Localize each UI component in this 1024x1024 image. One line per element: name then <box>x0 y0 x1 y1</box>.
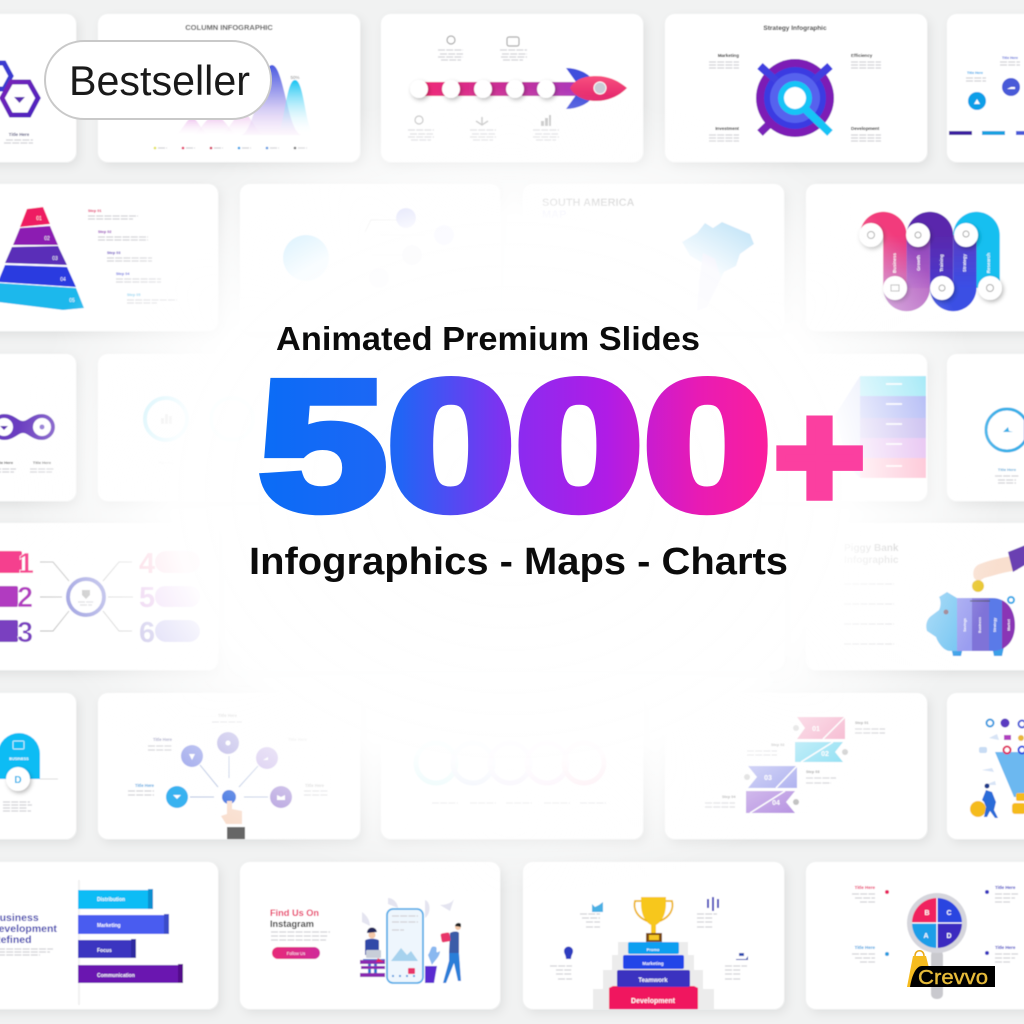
timeline bar <box>425 82 587 96</box>
panel: steps slide, row 1 right <box>947 14 1024 162</box>
map shape <box>682 222 754 284</box>
column bell chart: 50% <box>290 75 300 80</box>
chart legend <box>154 147 307 149</box>
panel: step ribbons slide: 03 <box>764 775 772 782</box>
person seated <box>360 927 385 977</box>
background stairs <box>593 942 714 1009</box>
panel: hexagon slide, row 1 <box>0 14 76 162</box>
panel: puzzle magnifier: Title Here <box>995 945 1016 950</box>
panel: blank center card right, row 4 <box>523 523 784 670</box>
person and coins <box>970 784 1024 818</box>
panel: link slide, row 3 left: Title Here <box>33 460 52 465</box>
labels: Efficiency <box>851 53 873 58</box>
panel: trophy staircase <box>523 862 784 1009</box>
panel: strategy infographic <box>665 14 927 162</box>
panel: puzzle magnifier: Title Here <box>855 885 875 890</box>
follow button: Follow Us <box>287 951 305 956</box>
labels: Development <box>851 126 880 131</box>
panel: business development bars <box>0 862 218 1009</box>
items 1 to 3: 1 <box>18 548 34 580</box>
badge: Bestseller <box>45 41 271 119</box>
panel: rings slide, row 3: Planning <box>158 460 174 465</box>
piggy: Savings <box>963 618 967 632</box>
pyramid captions <box>88 209 177 303</box>
panel: blank center card, row 4 <box>240 523 500 670</box>
follow button <box>272 947 320 959</box>
pyramid captions: Step 05 <box>127 293 141 297</box>
panel: strategy infographic: Strategy Infographic <box>763 25 827 32</box>
phone illustration <box>360 898 461 983</box>
panel: ribbon snake infographic: Training <box>939 254 944 272</box>
piggy: Market <box>1007 618 1011 631</box>
piggy: Business <box>978 617 982 633</box>
subheading: Infographics - Maps - Charts: Infographics - Maps - Charts <box>249 541 788 583</box>
panel: puzzle magnifier <box>806 862 1024 1009</box>
items 4 to 6: 5 <box>139 582 155 614</box>
piggy: Strategy <box>993 618 997 632</box>
panel: numbered hub slide <box>0 523 218 670</box>
pyramid <box>0 207 84 310</box>
person standing <box>440 923 461 983</box>
panel: South America map: MAP <box>542 209 566 221</box>
items 4 to 6: 4 <box>139 548 155 580</box>
pyramid: 04 <box>60 277 66 283</box>
panel: business development bars: Marketing <box>97 923 121 929</box>
panel: ribbon snake infographic: Research <box>986 253 991 273</box>
panel: step ribbons slide: 02 <box>821 751 829 758</box>
panel: puzzle magnifier: Title Here <box>855 945 875 950</box>
panel: arch slide, row 5 left: D <box>14 775 22 786</box>
white center fade <box>12 87 1008 893</box>
pyramid captions: Step 02 <box>98 230 112 234</box>
labels: Marketing <box>718 53 739 58</box>
icons and captions <box>550 897 748 979</box>
steps: Promo <box>647 947 660 952</box>
panel: gauge slide, row 3 right: Title Here <box>998 467 1017 472</box>
panel: step ribbons slide: 01 <box>812 726 820 733</box>
items 4 to 6 <box>103 548 200 649</box>
items 1 to 3 <box>0 548 69 649</box>
panel: radial hand slide: Title Here <box>288 737 308 742</box>
steps: Marketing <box>642 961 664 966</box>
panel: pyramid slide <box>0 184 218 331</box>
items 1 to 3: 3 <box>17 617 33 649</box>
panel: radial hand slide: Title Here <box>153 737 173 742</box>
panel: ribbon snake infographic: Business <box>892 253 897 273</box>
panel: piggy bank infographic <box>858 523 1024 674</box>
panel: column infographic: COLUMN INFOGRAPHIC <box>185 23 273 32</box>
logo: Crevvo: Crevvo <box>918 967 988 989</box>
panel: ribbon snake infographic <box>806 184 1024 331</box>
panel: piggy bank infographic: Infographic <box>844 555 899 566</box>
labels <box>709 53 881 141</box>
logo: Crevvo <box>907 951 995 989</box>
panel: steps slide, row 1 right: Title Here <box>1002 56 1018 60</box>
labels: Investment <box>715 126 739 131</box>
panel: step ribbons slide: Step 04 <box>722 795 736 799</box>
panel: South America map: SOUTH AMERICA <box>542 197 635 209</box>
pyramid: 05 <box>69 298 75 304</box>
panel: arch slide, row 5 left: BUSINESS <box>9 757 29 761</box>
hub <box>68 579 104 615</box>
panel: puzzle magnifier: C <box>946 910 952 917</box>
pyramid: 01 <box>36 216 42 222</box>
panel: mind map slide <box>240 184 500 331</box>
piggy <box>926 592 1016 657</box>
panel: find us on Instagram: Find Us On <box>270 908 319 918</box>
panel: ribbon snake infographic: Growth <box>916 255 921 271</box>
panel: ribbon snake infographic: Strategy <box>962 254 967 272</box>
panel: rings slide, row 3 <box>98 354 360 501</box>
panel: step ribbons slide: Step 03 <box>806 770 820 774</box>
pyramid captions: Step 01 <box>88 209 102 213</box>
panel: South America map <box>523 184 784 331</box>
panel: pastel layered chart <box>665 354 927 501</box>
panel: puzzle magnifier: A <box>923 933 929 940</box>
panel: step ribbons slide: Step 02 <box>771 743 785 747</box>
pyramid: 03 <box>52 256 58 262</box>
pyramid: 02 <box>44 236 50 242</box>
panel: business development bars: Distribution <box>97 897 125 903</box>
panel: business development bars: Focus <box>97 948 112 954</box>
panel: column infographic <box>98 14 360 162</box>
pyramid captions: Step 04 <box>116 272 130 276</box>
badge: Bestseller: Bestseller <box>69 57 250 104</box>
big number 5000+: + <box>774 372 864 540</box>
panel: gauge slide, row 3 right <box>947 354 1024 501</box>
panel: rocket timeline <box>381 14 643 162</box>
column bell chart <box>172 65 316 135</box>
panel: step ribbons slide <box>665 693 927 839</box>
panel: find us on Instagram <box>240 862 500 1009</box>
panel: puzzle magnifier: B <box>924 910 930 917</box>
timeline nodes <box>410 80 555 98</box>
panel: radial hand slide <box>98 693 360 839</box>
panel: radial hand slide: Title Here <box>305 783 325 788</box>
icons and captions <box>408 36 559 140</box>
steps <box>609 942 698 1009</box>
pyramid captions: Step 03 <box>107 251 121 255</box>
panel: funnel slide <box>947 693 1024 839</box>
panel: radial hand slide: Title Here <box>135 783 155 788</box>
big number 5000+ <box>258 342 864 548</box>
items 4 to 6: 6 <box>139 617 155 649</box>
panel: hexagon slide, row 1: Title Here <box>9 132 30 137</box>
steps: Teamwork <box>638 978 668 984</box>
hand with coin <box>972 544 1024 592</box>
panel: link slide, row 3 left <box>0 354 76 501</box>
panel: radial hand slide: Title Here <box>218 713 238 718</box>
items 1 to 3: 2 <box>17 582 33 614</box>
rocket <box>566 68 627 109</box>
heading: Animated Premium Slides: Animated Premium Slides <box>276 320 700 357</box>
target graphic <box>756 59 834 137</box>
big number 5000+: 5000 <box>258 342 772 548</box>
panel: step ribbons slide: Step 01 <box>855 721 869 725</box>
panel: business development bars: Communication <box>97 973 135 979</box>
panel: puzzle magnifier: D <box>946 933 952 940</box>
panel: step ribbons slide: 04 <box>772 800 780 807</box>
panel: find us on Instagram: Instagram <box>270 919 314 929</box>
steps: Development <box>631 998 676 1005</box>
panel: puzzle magnifier: Title Here <box>995 885 1016 890</box>
panel: steps slide, row 1 right: Title Here <box>967 71 983 75</box>
trophy <box>634 897 672 942</box>
panel: faint circles slide <box>381 693 643 839</box>
panel: piggy bank infographic: Piggy Bank <box>844 543 899 554</box>
panel: arch slide, row 5 left <box>0 693 76 839</box>
